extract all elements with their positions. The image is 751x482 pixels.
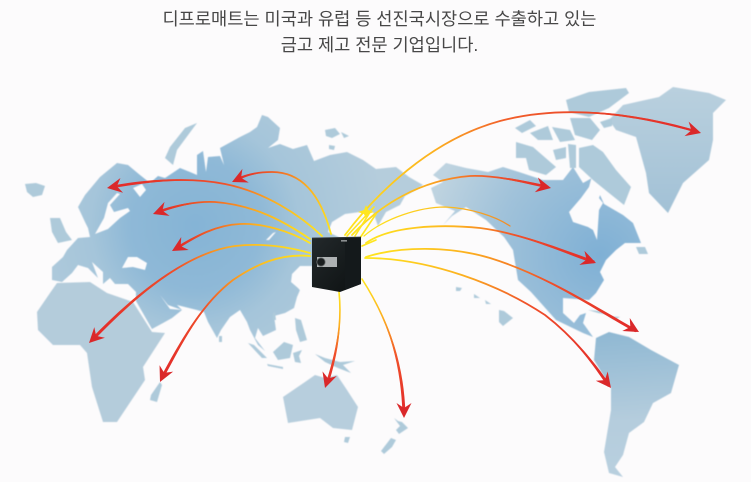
Greenland — [609, 87, 726, 213]
yellow flare — [347, 205, 376, 246]
arrow: to New Zealand — [362, 279, 412, 418]
Australia — [283, 375, 358, 430]
Africa — [37, 282, 165, 422]
arrow: to Central Asia — [168, 224, 310, 257]
arrow: to Greenland — [345, 112, 703, 235]
title: 금고 제고 전문 기업입니다. — [281, 35, 478, 55]
arrow: to West Africa — [84, 245, 310, 348]
arrow: to Eastern Europe — [150, 202, 310, 239]
arrow: to Scandinavia — [106, 178, 322, 236]
Islands — [25, 88, 648, 454]
arrow: to Madagascar — [153, 256, 310, 385]
arrow: to Caribbean — [366, 249, 643, 338]
arrow: to South America — [365, 258, 617, 393]
North America — [431, 163, 641, 337]
title — [162, 9, 596, 55]
map: continents — [25, 87, 726, 477]
arrow: to Australia — [318, 292, 340, 390]
arrow: to Canada — [352, 176, 553, 235]
Eurasia — [52, 115, 423, 351]
title: 디프로매트는 미국과 유럽 등 선진국시장으로 수출하고 있는 — [162, 9, 596, 29]
arrow: to northern Russia — [229, 169, 331, 234]
icon: black safe — [312, 237, 361, 292]
arrows fan — [84, 112, 703, 418]
South America — [594, 332, 679, 477]
arrow: thin line to western Canada — [364, 207, 510, 236]
arrow: to eastern USA — [366, 226, 599, 270]
Seas — [95, 172, 603, 310]
